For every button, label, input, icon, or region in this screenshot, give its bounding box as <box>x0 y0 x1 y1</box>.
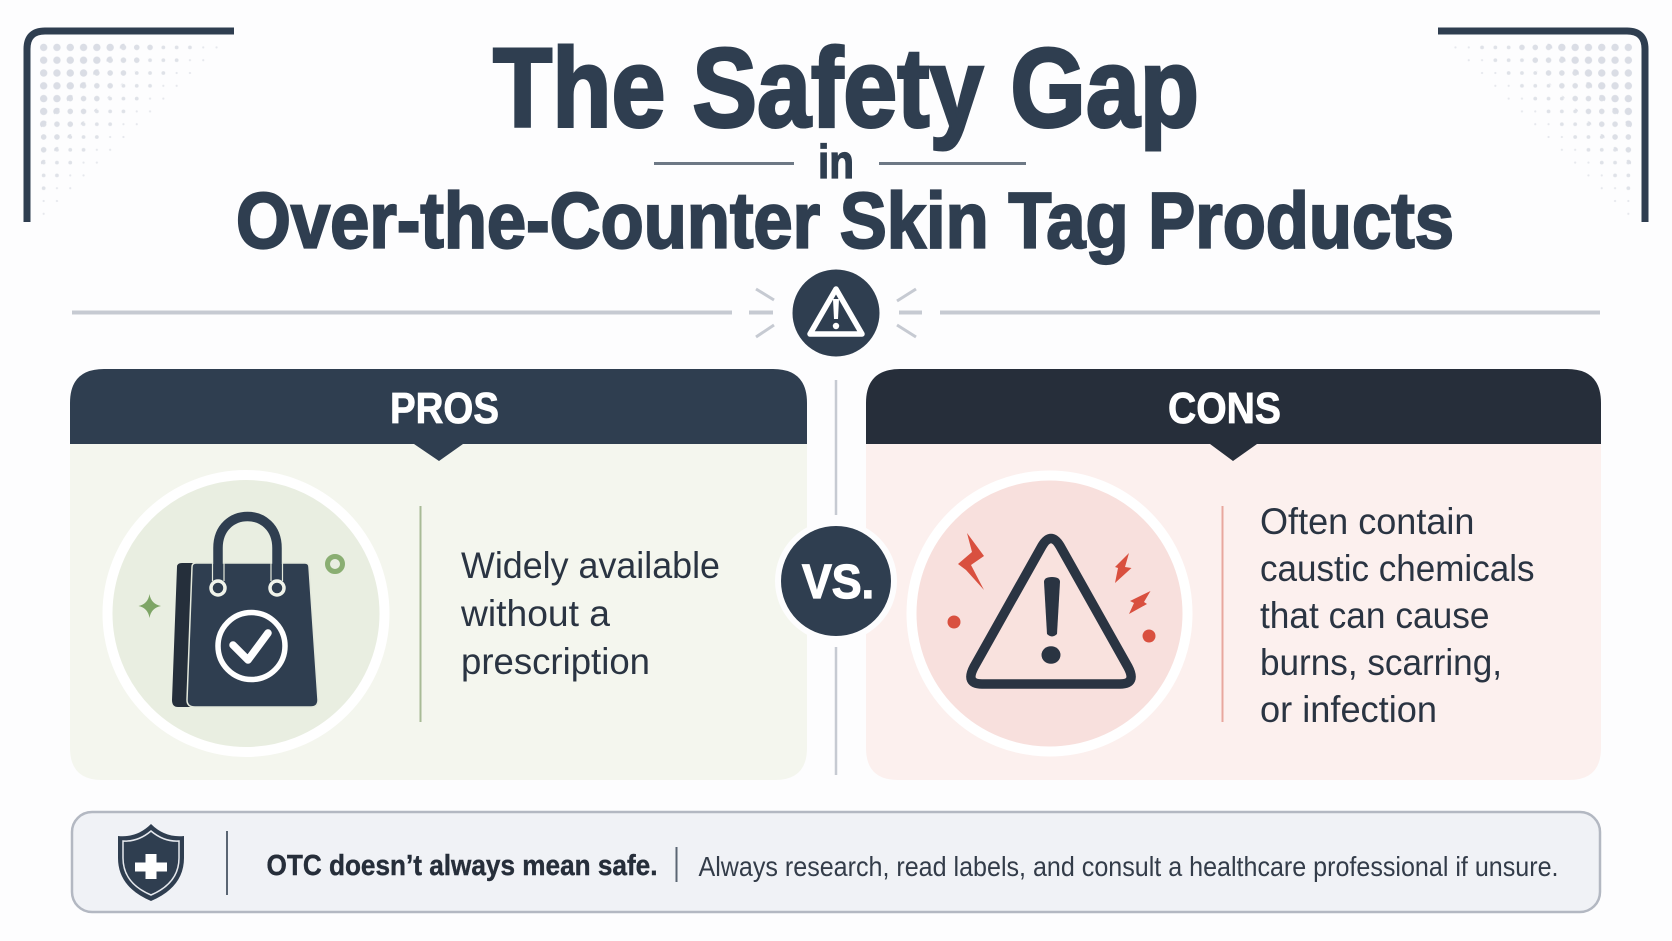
cons vertical rule <box>1222 506 1224 722</box>
callout advice text: Always research, read labels, and consult a healthcare professional if unsure. <box>698 851 1558 882</box>
pros text <box>460 545 720 682</box>
cons text: or infection <box>1260 689 1437 730</box>
pros text: Widely available <box>461 545 720 586</box>
pros vertical rule <box>420 506 422 722</box>
corner bracket with dots: top right <box>1438 31 1645 229</box>
center vertical divider <box>835 380 837 775</box>
cons text: caustic chemicals <box>1260 548 1534 589</box>
cons text: that can cause <box>1260 595 1490 636</box>
callout: safety note <box>72 812 1600 912</box>
pros text: without a <box>460 593 610 634</box>
cons header <box>866 369 1601 461</box>
VS badge: VS. <box>802 556 874 609</box>
title line 2: Over-the-Counter Skin Tag Products <box>236 176 1454 264</box>
corner bracket with dots: top left <box>27 31 234 229</box>
cons header: CONS <box>1168 384 1281 433</box>
cons text: burns, scarring, <box>1260 642 1502 683</box>
pros text: prescription <box>461 641 650 682</box>
icon: warning triangle with sparks <box>912 476 1188 752</box>
title line 1: The Safety Gap <box>493 26 1199 150</box>
title connector: in: in <box>818 135 854 188</box>
divider with warning badge <box>72 270 1600 356</box>
icon: warning badge <box>792 270 880 356</box>
panel: cons <box>866 369 1601 780</box>
pros header <box>70 369 807 461</box>
title <box>236 26 1454 264</box>
panel: pros <box>70 369 807 780</box>
VS badge <box>775 520 897 642</box>
cons text: Often contain <box>1260 501 1474 542</box>
callout bold statement: OTC doesn’t always mean safe. <box>266 850 658 882</box>
icon: shield with cross <box>118 824 184 901</box>
pros header: PROS <box>390 384 499 433</box>
cons text <box>1260 501 1534 730</box>
icon: shopping bag with check <box>108 475 384 752</box>
